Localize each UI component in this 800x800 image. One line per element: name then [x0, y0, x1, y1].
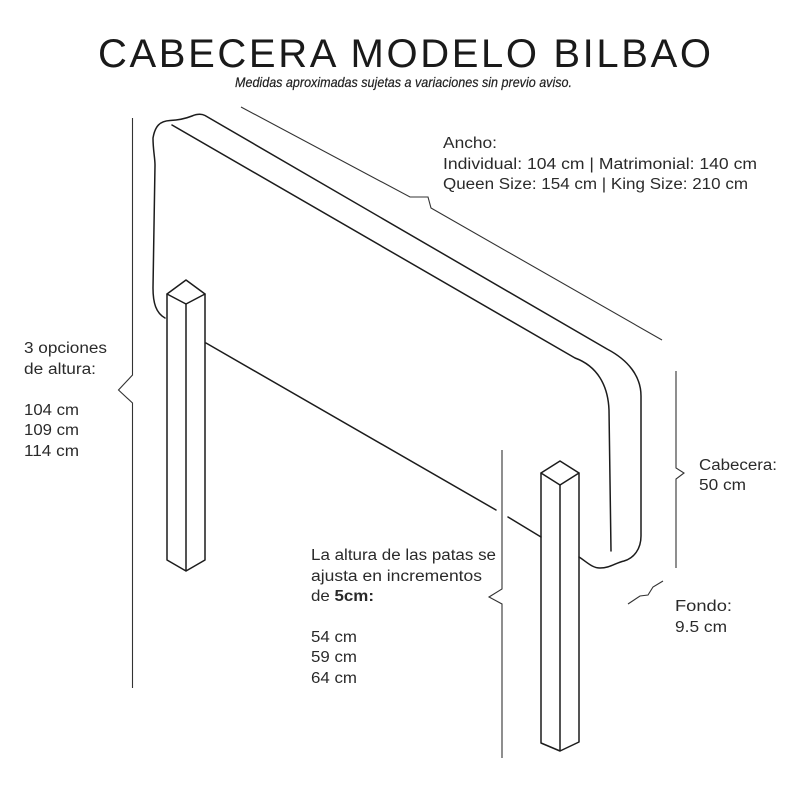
text: depth: 9.5 cm	[675, 619, 727, 636]
dimension line: depth	[628, 581, 663, 604]
text: headboard height	[699, 457, 777, 494]
text: height options: de altura:	[24, 361, 96, 378]
dimension line: total height	[118, 118, 132, 688]
text: leg height options: de 5cm:	[311, 588, 374, 605]
text: leg height options: 54 cm	[311, 629, 357, 646]
dimension line: leg height	[489, 450, 502, 758]
headboard illustration	[153, 114, 641, 568]
text: depth: Fondo:	[675, 598, 732, 615]
text: width options	[443, 135, 757, 193]
text: width options: Individual: 104 cm | Matrimonial: 140 cm	[443, 156, 757, 173]
text: depth	[675, 598, 732, 636]
text: height options: 114 cm	[24, 443, 79, 460]
text: leg height options: ajusta en incrementos	[311, 568, 482, 585]
right leg	[541, 461, 579, 751]
headboard outline	[153, 114, 641, 568]
text: headboard height: Cabecera:	[699, 457, 777, 474]
text: leg height options: 59 cm	[311, 649, 357, 666]
text: leg height options	[311, 547, 496, 687]
text: headboard height: 50 cm	[699, 477, 746, 494]
title: CABECERA MODELO BILBAO	[98, 32, 711, 76]
text: height options: 3 opciones	[24, 340, 107, 357]
subtitle: Medidas aproximadas sujetas a variaciones sin previo aviso.	[235, 74, 572, 90]
text: width options: Queen Size: 154 cm | King Size: 210 cm	[443, 176, 748, 193]
headboard inner edge	[172, 125, 611, 551]
text: leg height options: La altura de las patas se	[311, 547, 496, 564]
text: height options: 104 cm	[24, 402, 79, 419]
headboard lower edge	[206, 343, 541, 537]
text: leg height options: 64 cm	[311, 670, 357, 687]
text: height options	[24, 340, 107, 460]
dimension line: headboard height	[676, 371, 684, 568]
left leg	[167, 280, 205, 571]
text: width options: Ancho:	[443, 135, 497, 152]
dimension line: width	[241, 107, 662, 340]
text: height options: 109 cm	[24, 422, 79, 439]
